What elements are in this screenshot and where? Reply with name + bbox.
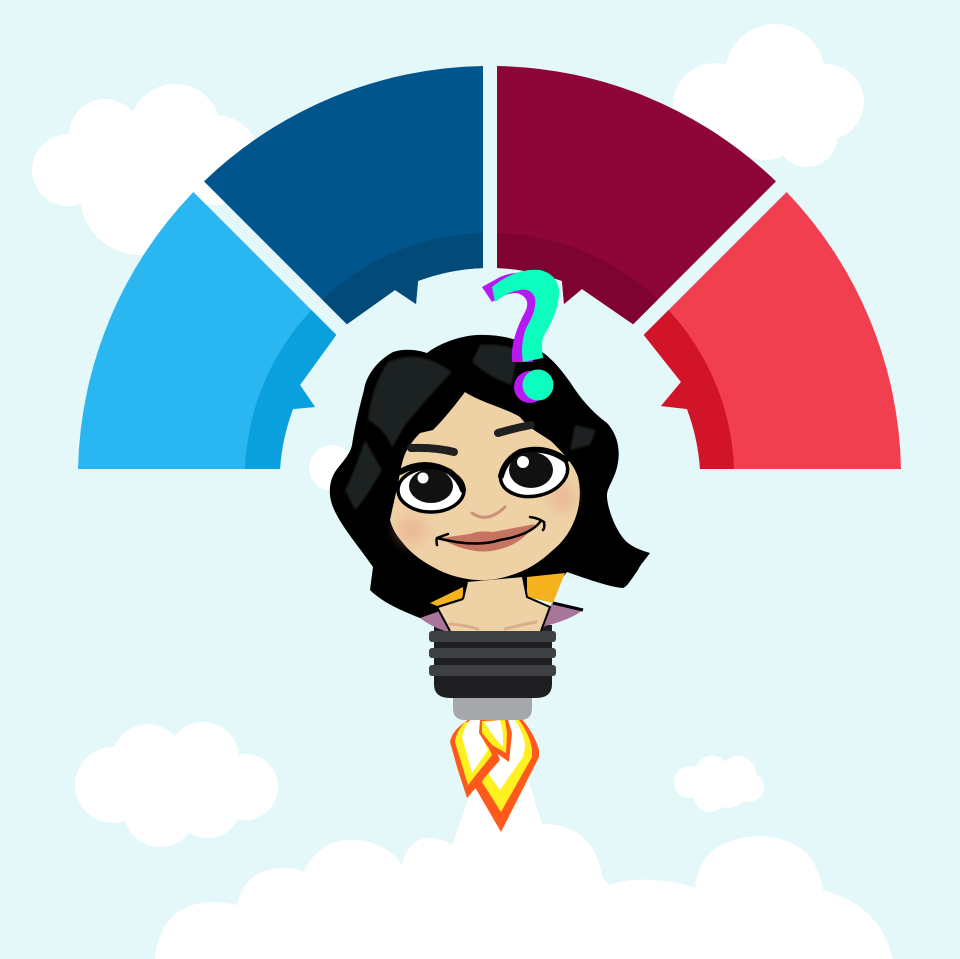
right eye xyxy=(496,443,572,503)
rocket body xyxy=(429,625,556,698)
arch segment: maroon xyxy=(497,66,776,324)
collarbones xyxy=(450,622,536,629)
rocket smoke xyxy=(440,760,560,880)
cloud: lower left xyxy=(75,722,278,847)
cloud: bottom xyxy=(155,824,893,959)
eyebrows xyxy=(411,425,531,452)
arch segment: light blue xyxy=(78,192,336,469)
cheeks xyxy=(397,516,427,544)
face xyxy=(390,392,580,580)
cloud: top right xyxy=(673,24,864,167)
hair xyxy=(330,335,650,618)
smile line xyxy=(436,517,544,545)
collar xyxy=(430,573,565,606)
neck and chest xyxy=(438,577,550,631)
cloud: behind hair xyxy=(309,445,355,491)
rocket flames xyxy=(450,719,539,832)
rocket nozzle xyxy=(453,696,532,720)
character head xyxy=(330,335,650,631)
shirt xyxy=(420,603,583,631)
lips xyxy=(441,524,535,552)
cloud: top left xyxy=(32,84,260,255)
nose xyxy=(472,507,505,517)
cloud: small right xyxy=(674,756,764,812)
hair highlights xyxy=(345,345,596,510)
arch segment: navy xyxy=(204,66,483,324)
neck outline xyxy=(437,577,550,631)
arch segment: red xyxy=(644,192,901,469)
icon: question mark xyxy=(482,270,559,403)
left eye xyxy=(398,465,464,512)
collar stroke xyxy=(553,603,583,610)
